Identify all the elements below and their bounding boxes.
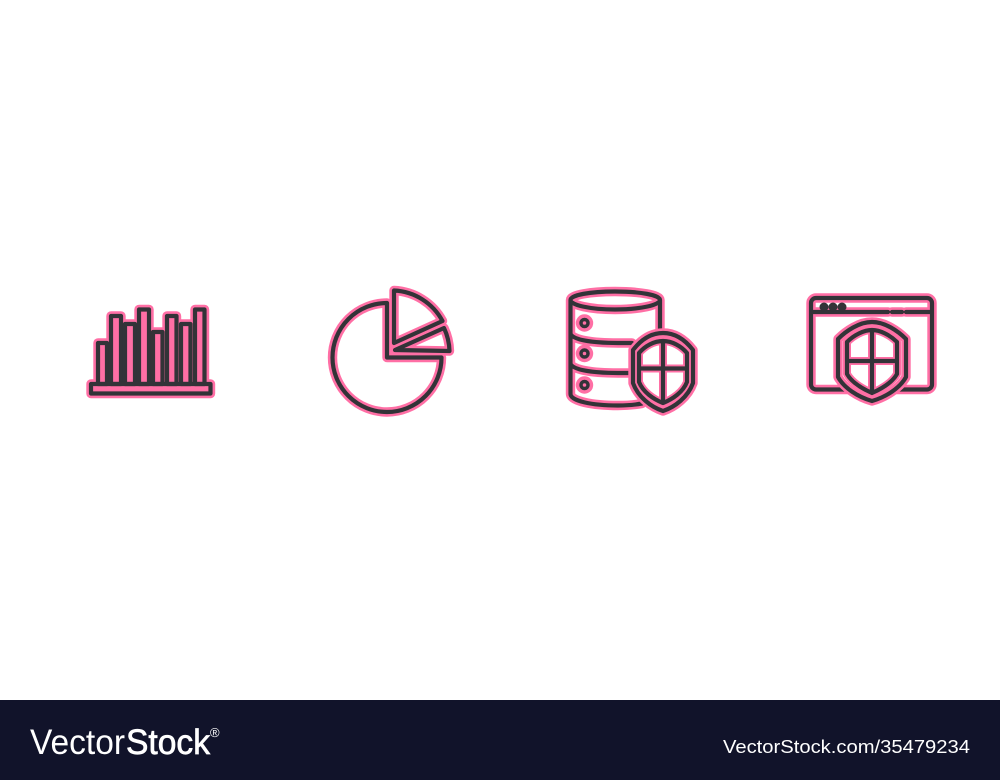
icon: database with shield bbox=[570, 292, 693, 411]
logo: VectorStock: Stock bbox=[126, 723, 210, 762]
image id caption: VectorStock.com/35479234 bbox=[723, 736, 970, 757]
icon: pie chart bbox=[332, 290, 450, 412]
icon: browser window with shield bbox=[811, 298, 932, 401]
logo: VectorStock: ® bbox=[210, 725, 220, 740]
icon: bar chart bbox=[91, 310, 210, 394]
logo: VectorStock bbox=[30, 723, 220, 762]
logo: VectorStock: Vector bbox=[30, 723, 125, 762]
footer bar bbox=[0, 700, 1000, 780]
